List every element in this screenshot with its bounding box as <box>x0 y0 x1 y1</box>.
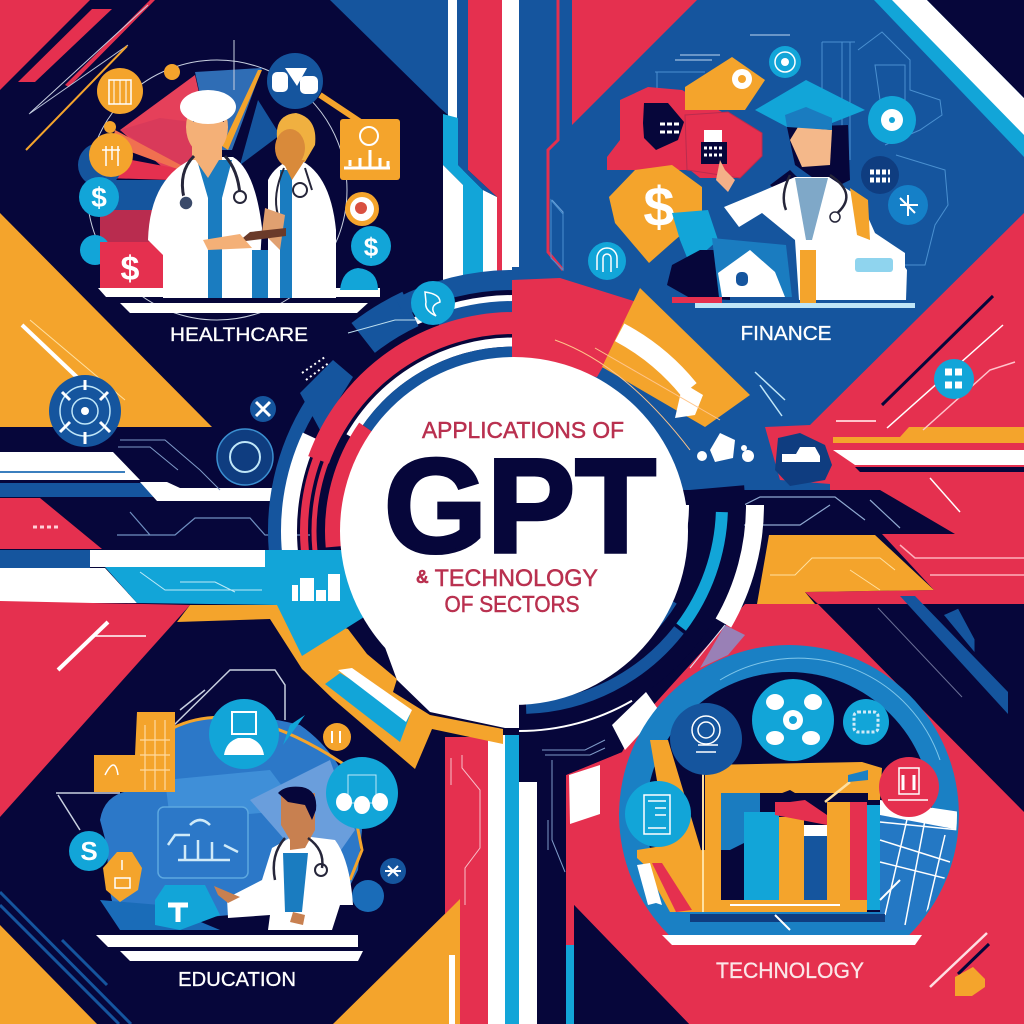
label: finance: FINANCE <box>740 323 832 345</box>
platform <box>120 303 368 313</box>
icon: navy hexagon <box>643 103 684 150</box>
red block cluster <box>607 57 765 178</box>
icon: small gear <box>380 858 406 884</box>
ring: lower-left orange and cyan bands <box>105 550 503 769</box>
figure: female doctor <box>262 113 336 298</box>
technology dome <box>619 645 959 935</box>
subtitle line 1: & <box>416 567 429 587</box>
panel: education <box>56 670 406 991</box>
lower-left blocks <box>0 498 102 549</box>
laptop base <box>662 880 922 945</box>
lower-right blocks <box>566 604 1024 1024</box>
ring: upper-left blue, cyan and red arcs <box>170 187 858 875</box>
icon: dollar circle <box>69 831 109 871</box>
icon: magnifier circle <box>670 703 742 775</box>
figure: graduate <box>716 80 905 305</box>
icon: cyan chart circle <box>326 757 398 829</box>
small decorative leaf strokes <box>755 372 785 416</box>
icon: navy hexagon vehicle <box>775 433 832 486</box>
platform <box>96 935 363 961</box>
title <box>384 417 656 617</box>
icon: thumbprint top <box>769 46 801 78</box>
panel: healthcare <box>78 40 400 346</box>
icon: small right medallions <box>340 192 391 290</box>
icon: orange card with chart <box>340 119 400 180</box>
icon: orange dollar octagon: $ <box>643 175 675 238</box>
technology left red arcs <box>637 863 692 912</box>
icon: small right medallions: $ <box>364 232 379 262</box>
graduation cap <box>755 80 865 127</box>
subtitle line 2: OF SECTORS <box>444 591 580 617</box>
label: education: EDUCATION <box>178 969 296 991</box>
icon: orange hex tool <box>103 852 142 902</box>
icon: cyan puzzle circle <box>934 359 974 399</box>
icon: red dollar card: $ <box>121 250 140 288</box>
icon: dollar circle: S <box>80 836 98 866</box>
icon: cyan medical circle <box>411 281 455 325</box>
icon: clouds <box>697 433 754 462</box>
figure: open book and hands <box>203 228 286 298</box>
circuit outline frame <box>56 670 285 830</box>
icon: orange calendar <box>97 64 180 114</box>
icons: right-hand circles <box>861 96 928 225</box>
right-side small icons <box>697 359 974 486</box>
central ring segments <box>105 187 858 875</box>
icon: dollar circle left <box>79 177 119 217</box>
icon: gears circle <box>752 679 834 761</box>
icon: red device circle <box>879 757 939 817</box>
icon: fingerprint <box>588 242 626 280</box>
ring: navy and blue lower-right arcs <box>210 196 828 814</box>
icon: cyan person circle <box>209 699 279 769</box>
icon: small data circle <box>843 699 889 745</box>
icon: dot matrix and link <box>302 320 420 380</box>
label: healthcare: HEALTHCARE <box>170 325 308 346</box>
icon: orange dollar octagon <box>609 165 702 263</box>
technology orange frame and bars <box>637 740 882 912</box>
figure: male doctor <box>148 90 262 298</box>
icon: corner badge and strokes <box>930 933 989 996</box>
icon: document circle <box>625 781 691 847</box>
icon: network globe <box>49 375 121 447</box>
icon: receipt <box>701 130 727 164</box>
icon: orange chart badge <box>89 121 133 177</box>
icon: screen <box>158 807 248 878</box>
graduate hair and body <box>787 125 850 190</box>
icon: small orange circle <box>323 723 351 751</box>
label: technology: TECHNOLOGY <box>716 958 864 983</box>
icon: dollar circle left: $ <box>91 182 107 213</box>
ring: upper-right red and orange sectors <box>210 227 818 835</box>
healthcare side icons <box>49 281 455 490</box>
subtitle line 1: TECHNOLOGY <box>429 565 598 592</box>
title: GPT: GPT <box>384 432 656 581</box>
icon: orange building <box>94 712 175 792</box>
icon: red dollar card <box>98 242 380 297</box>
center white disc <box>340 357 689 728</box>
title: applications of: APPLICATIONS OF <box>422 417 624 443</box>
blue cloud background <box>100 715 384 930</box>
healthcare fan chart <box>78 40 365 320</box>
technology map tiles <box>880 800 960 930</box>
panel: finance <box>551 32 948 345</box>
icon: blue circle with puzzle <box>267 53 323 109</box>
icon: cyan bar-chart town <box>292 574 340 601</box>
laptop and box <box>667 210 915 308</box>
thin circuit outlines <box>551 32 948 270</box>
panel: technology <box>619 645 989 996</box>
figure: doctor presenting <box>214 787 353 930</box>
icon: circuit brain <box>118 396 276 490</box>
